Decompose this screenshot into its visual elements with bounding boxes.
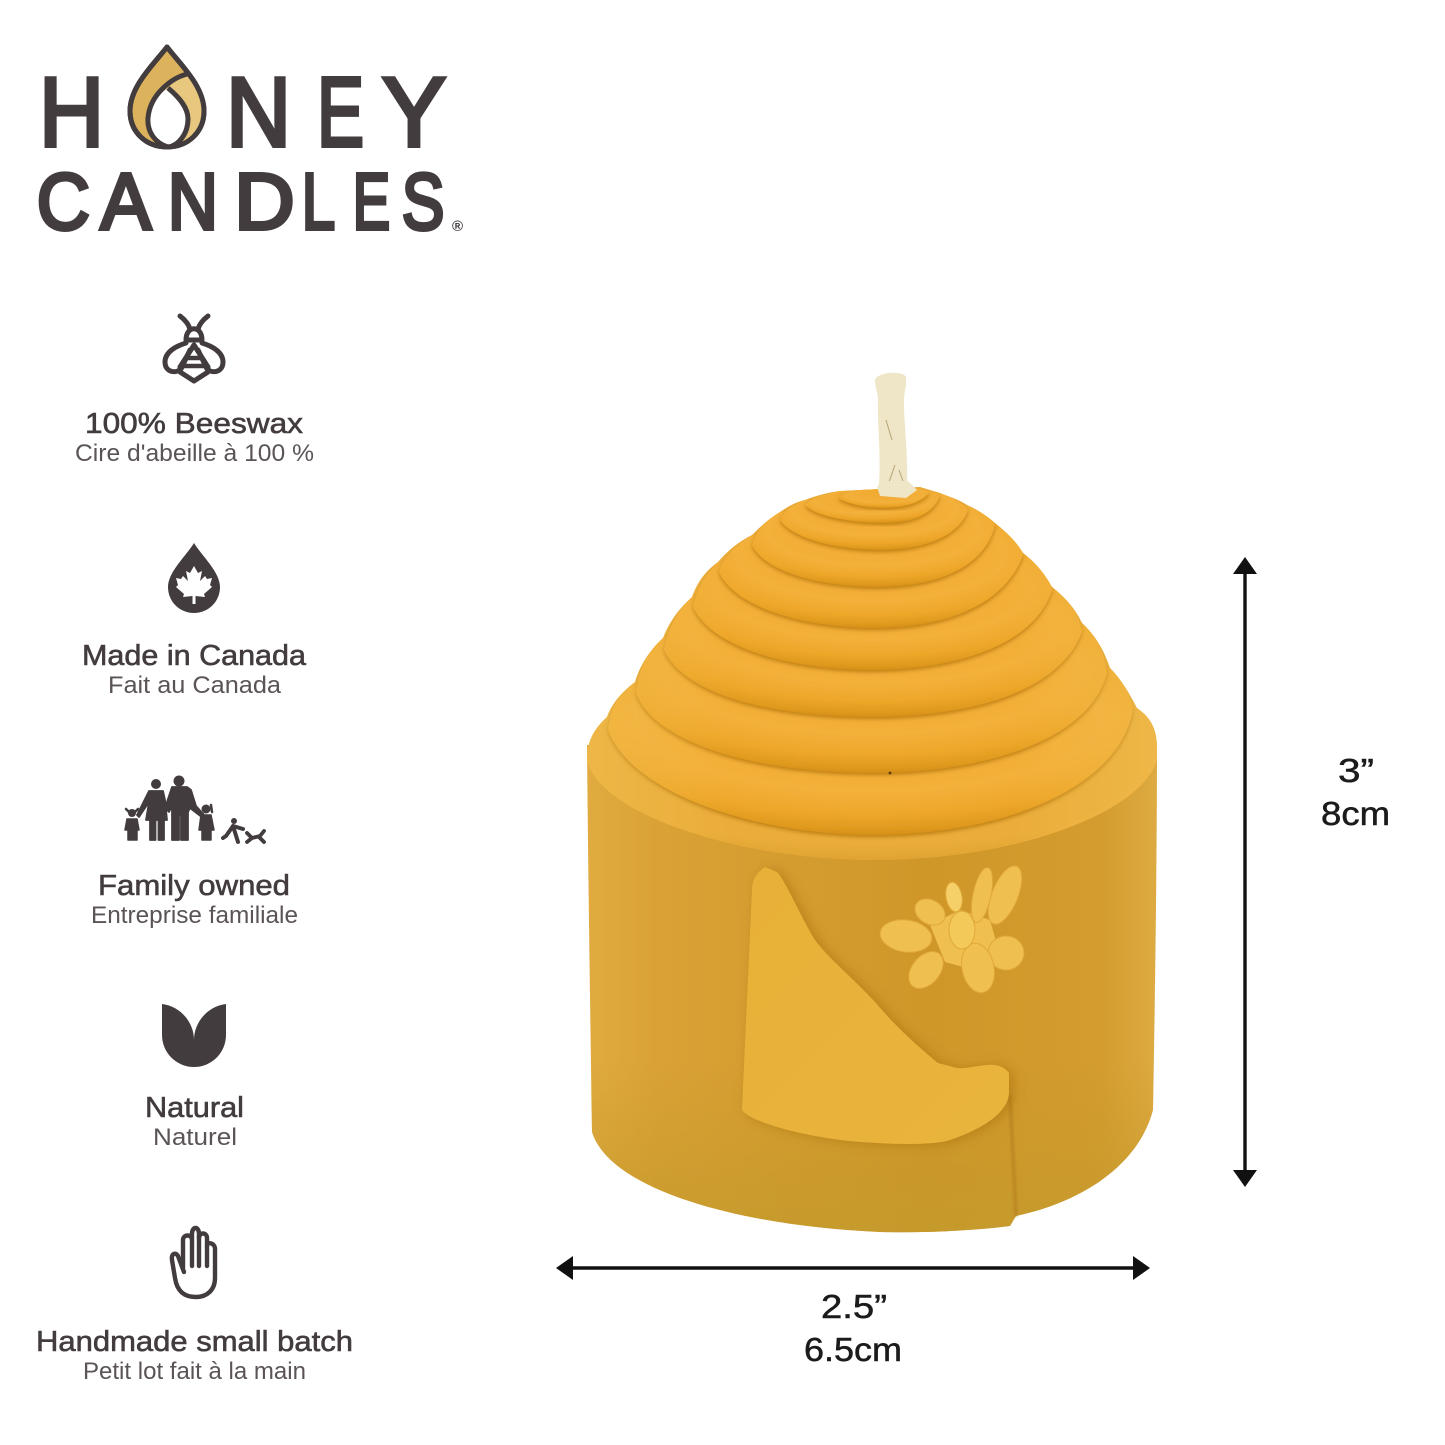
- dimension label: height: [1321, 752, 1390, 832]
- logo wordmark: Honey: N: [226, 58, 291, 167]
- heading: Made in Canada: [82, 640, 307, 672]
- feature: Made in Canada: [82, 543, 307, 699]
- arrow: width: [556, 1256, 1150, 1280]
- icon: drop with maple leaf: [168, 543, 220, 613]
- icon: family with child and dog: [125, 776, 264, 842]
- logo flame icon: [130, 47, 204, 147]
- heading: Natural: [145, 1092, 244, 1124]
- heading: Handmade small batch: [36, 1326, 353, 1358]
- feature: Family owned: [91, 776, 298, 929]
- logo wordmark: Candles: L: [302, 157, 335, 246]
- wick: [875, 373, 917, 496]
- feature: Natural: [145, 1004, 244, 1151]
- subheading: Naturel: [153, 1124, 237, 1151]
- registered mark: ®: [452, 218, 463, 235]
- wax bee relief: [878, 861, 1029, 996]
- logo wordmark: Candles: S: [402, 157, 444, 247]
- dimension label: height: 3”: [1338, 752, 1374, 789]
- arrow: height: [1233, 557, 1257, 1187]
- subheading: Cire d'abeille à 100 %: [75, 440, 314, 467]
- icon: tulip leaf: [162, 1004, 226, 1067]
- feature: Handmade small batch: [36, 1228, 353, 1385]
- subheading: Entreprise familiale: [91, 902, 298, 929]
- icon: hand: [172, 1228, 215, 1297]
- logo wordmark: Candles: D: [234, 158, 295, 247]
- feature: 100% Beeswax: [75, 316, 314, 467]
- logo wordmark: Honey: [39, 57, 446, 168]
- wax sheet step: [1010, 1095, 1016, 1216]
- wax sheet flap: [742, 867, 1009, 1144]
- logo wordmark: Candles: C: [37, 157, 90, 247]
- logo wordmark: Candles: N: [168, 156, 218, 246]
- speck: [889, 772, 891, 774]
- wick base: [877, 481, 917, 498]
- subheading: Fait au Canada: [108, 672, 282, 699]
- logo wordmark: Candles: E: [353, 156, 390, 246]
- logo wordmark: Honey: E: [317, 59, 364, 168]
- logo wordmark: Honey: H: [39, 58, 104, 167]
- heading: Family owned: [98, 870, 290, 902]
- dimension label: width: 2.5”: [821, 1288, 887, 1325]
- logo wordmark: Candles: [37, 156, 444, 247]
- dimension label: height: 8cm: [1321, 795, 1390, 832]
- stacked wax rings: [587, 480, 1157, 880]
- subheading: Petit lot fait à la main: [83, 1358, 306, 1385]
- heading: 100% Beeswax: [85, 408, 304, 440]
- candle: beehive: [587, 373, 1157, 1232]
- candle body: [587, 745, 1157, 1232]
- logo wordmark: Honey: Y: [382, 57, 446, 167]
- dimension label: width: [804, 1288, 902, 1368]
- icon: bee: [165, 316, 223, 381]
- dimension label: width: 6.5cm: [804, 1331, 902, 1368]
- logo wordmark: Candles: A: [100, 156, 151, 246]
- logo: Honey Candles: [37, 47, 463, 247]
